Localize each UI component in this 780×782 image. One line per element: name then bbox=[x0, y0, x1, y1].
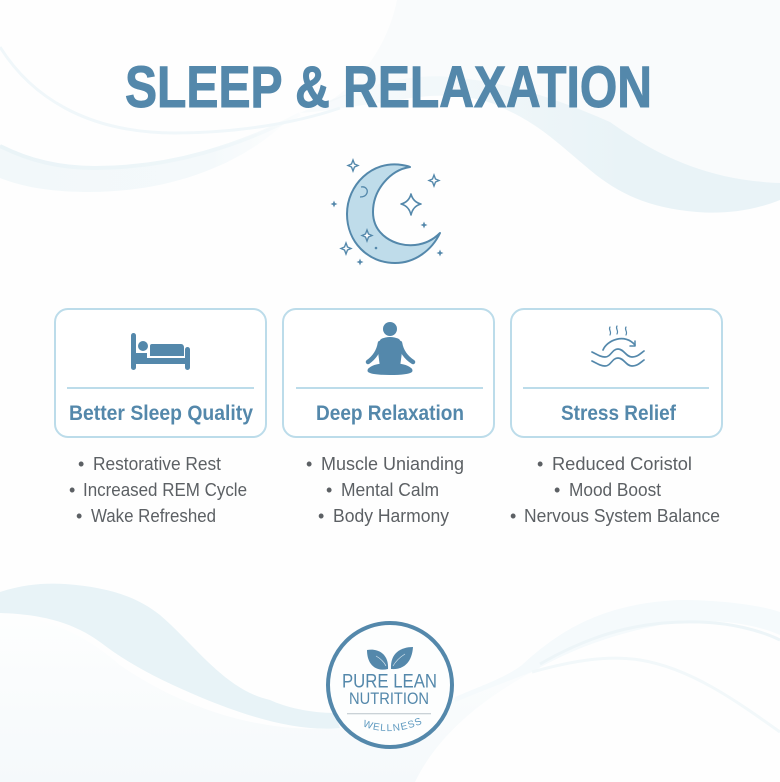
icon: leaves bbox=[367, 647, 413, 670]
icon: meditating figure bbox=[368, 322, 413, 375]
logo text: pure lean: PURE LEAN bbox=[342, 670, 437, 692]
icon: bed bbox=[131, 333, 190, 370]
icon: steam and waves bbox=[592, 326, 644, 366]
text block: deep relaxation bullets: • bbox=[306, 454, 312, 474]
text block: better sleep bullets: • bbox=[69, 480, 75, 500]
panel: deep relaxation bbox=[282, 308, 495, 438]
text block: better sleep bullets: • bbox=[76, 506, 82, 526]
heading: stress relief: Stress Relief bbox=[561, 402, 677, 425]
text block: deep relaxation bullets: Muscle Unianding bbox=[321, 454, 464, 474]
logo text: nutrition: NUTRITION bbox=[349, 689, 429, 708]
text block: better sleep bullets: Restorative Rest bbox=[93, 454, 221, 474]
text block: stress relief bullets: • bbox=[510, 506, 516, 526]
panel: better sleep quality bbox=[54, 308, 267, 438]
heading: better sleep quality: Better Sleep Quality bbox=[69, 402, 253, 425]
text block: better sleep bullets: Increased REM Cycle bbox=[83, 480, 247, 500]
text block: better sleep bullets: Wake Refreshed bbox=[91, 506, 216, 526]
panel: stress relief bbox=[510, 308, 723, 438]
text block: stress relief bullets: Reduced Coristol bbox=[552, 454, 692, 474]
text block: stress relief bullets: • bbox=[554, 480, 560, 500]
heading: deep relaxation: Deep Relaxation bbox=[316, 402, 464, 425]
text block: stress relief bullets: Mood Boost bbox=[569, 480, 661, 500]
text block: stress relief bullets: • bbox=[537, 454, 543, 474]
text block: deep relaxation bullets: • bbox=[318, 506, 324, 526]
text block: stress relief bullets: Nervous System Balance bbox=[524, 506, 720, 526]
title: SLEEP & RELAXATION bbox=[125, 55, 652, 120]
text block: deep relaxation bullets: • bbox=[326, 480, 332, 500]
text block: deep relaxation bullets: Mental Calm bbox=[341, 480, 439, 500]
text block: better sleep bullets: • bbox=[78, 454, 84, 474]
text block: deep relaxation bullets: Body Harmony bbox=[333, 506, 449, 526]
logo text: wellness: WELLNESS bbox=[364, 718, 422, 732]
